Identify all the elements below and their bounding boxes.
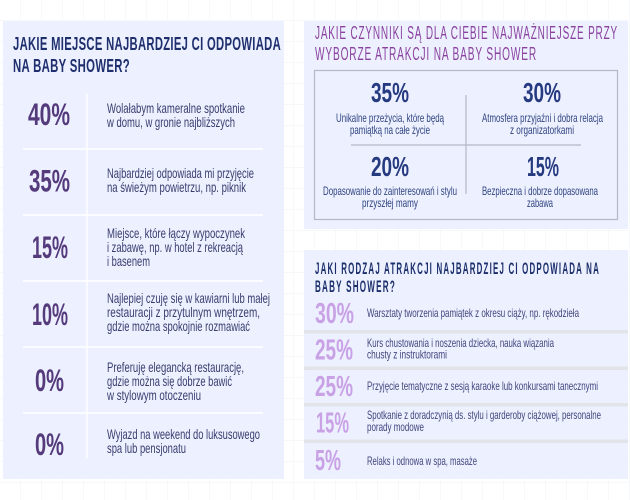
- row: 30% workshops: 30%: [315, 298, 354, 330]
- row: 0% restaurant: gdzie można się dobrze bawić: [107, 373, 232, 389]
- row: 15% style advice: porady modowe: [367, 420, 424, 434]
- row: 0% restaurant: w stylowym otoczeniu: [106, 387, 201, 403]
- row: 0% weekend: 0%: [35, 426, 64, 462]
- row: 25% babywearing: chusty z instruktorami: [367, 348, 447, 362]
- row: 0% weekend: spa lub pensjonatu: [107, 440, 186, 456]
- heading: preferred place: NA BABY SHOWER?: [13, 56, 130, 76]
- stat: 35%: pamiątką na całe życie: [350, 123, 430, 137]
- row: 15%: i zabawę, np. w hotel z rekreacją: [107, 239, 243, 255]
- row: 0% restaurant: Preferuję elegancką restaurację,: [107, 359, 244, 375]
- row: 25% themed party: 25%: [315, 371, 353, 403]
- stat: 15%: 15%: [527, 151, 559, 182]
- stat: 20%: 20%: [371, 151, 409, 182]
- row: 15% style advice: [316, 408, 601, 440]
- heading: preferred place: [13, 34, 281, 76]
- row: 35%: [29, 162, 254, 198]
- stat: 20%: [323, 151, 457, 210]
- row: 25% babywearing: [315, 334, 554, 366]
- stat: 15%: zabawa: [527, 196, 553, 210]
- row: 10%: restauracji z przytulnym wnętrzem,: [107, 304, 260, 320]
- stat: 20%: Dopasowanie do zainteresowań i stylu: [323, 184, 457, 198]
- row: 15%: i basenem: [107, 253, 150, 269]
- row: 40%: [28, 96, 245, 132]
- heading: attraction type: BABY SHOWER?: [315, 278, 396, 296]
- stat: 35%: 35%: [371, 77, 409, 108]
- stat: 30%: z organizatorkami: [510, 123, 574, 137]
- row: 0% restaurant: [35, 359, 244, 403]
- row: 0% weekend: [35, 426, 260, 462]
- row: 0% weekend: Wyjazd na weekend do luksusowego: [107, 426, 260, 442]
- stat: 30%: 30%: [523, 77, 561, 108]
- stat: 20%: przyszłej mamy: [362, 196, 418, 210]
- row: 5% spa: [315, 445, 477, 477]
- panel: preferred place: [3, 21, 284, 479]
- row: 5% spa: Relaks i odnowa w spa, masaże: [367, 454, 477, 468]
- stat: 35%: Unikalne przeżycia, które będą: [336, 111, 444, 125]
- row: 15% style advice: 15%: [316, 408, 349, 440]
- row: 40%: Wolałabym kameralne spotkanie: [107, 100, 245, 116]
- row: 30% workshops: [315, 298, 579, 330]
- row: 0% restaurant: 0%: [35, 362, 64, 398]
- row: 35%: 35%: [29, 162, 70, 198]
- row: 10%: [32, 290, 270, 334]
- row: 5% spa: 5%: [315, 445, 341, 477]
- heading: attraction type: [315, 260, 600, 296]
- row: 25% themed party: [315, 371, 598, 403]
- stat: 30%: [482, 77, 603, 137]
- row: 15%: 15%: [32, 229, 68, 265]
- row: 10%: Najlepiej czuję się w kawiarni lub małej: [107, 290, 270, 306]
- heading: important factors: [315, 23, 618, 64]
- row: 40%: w domu, w gronie najbliższych: [106, 114, 235, 130]
- row: 35%: Najbardziej odpowiada mi przyjęcie: [107, 165, 254, 181]
- row: 25% babywearing: 25%: [315, 334, 353, 366]
- row: 35%: na świeżym powietrzu, np. piknik: [107, 179, 247, 195]
- panel: attraction type: [304, 250, 628, 479]
- row: 10%: 10%: [32, 296, 68, 332]
- row: 10%: gdzie można spokojnie rozmawiać: [107, 318, 250, 334]
- row: 40%: 40%: [28, 96, 70, 132]
- row: 15%: [32, 225, 246, 269]
- heading: preferred place: JAKIE MIEJSCE NAJBARDZIEJ CI ODPOWIADA: [13, 34, 281, 54]
- panel: important factors: [304, 21, 628, 229]
- stat: 15%: [482, 151, 598, 210]
- row: 15%: Miejsce, które łączy wypoczynek: [107, 225, 246, 241]
- stat: 35%: [336, 77, 444, 137]
